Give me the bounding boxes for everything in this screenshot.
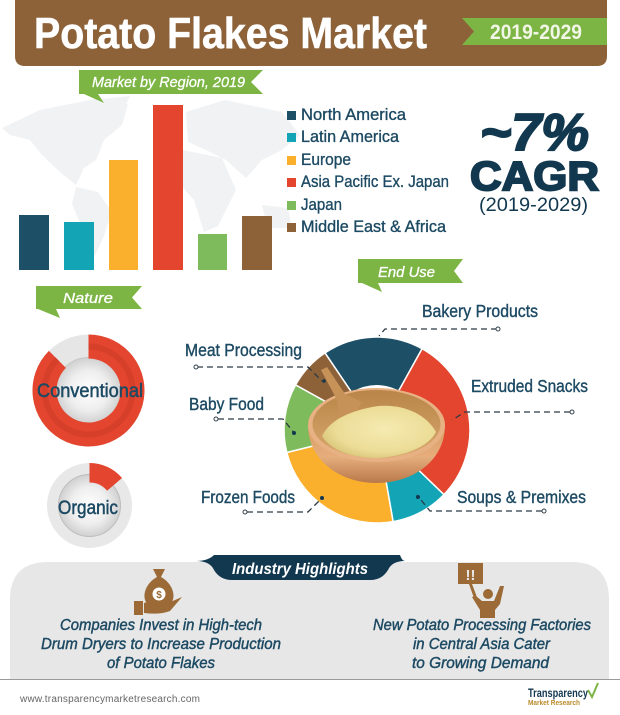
header banner: [15, 0, 607, 66]
text: processing factories: [373, 617, 591, 672]
label: bakery products: Bakery Products: [422, 301, 538, 321]
ribbon: nature: [36, 286, 142, 318]
ribbon: market by region: Market by Region, 2019: [92, 74, 246, 91]
ribbon: end use: End Use: [378, 264, 435, 281]
ribbon: nature: Nature: [63, 290, 113, 307]
label: soups and premixes: [416, 487, 586, 513]
highlights tab: Industry Highlights: [232, 561, 368, 578]
text: drum dryers: of Potato Flakes: [107, 655, 215, 672]
label: soups and premixes: Soups & Premixes: [457, 487, 586, 507]
pie chart: end use: [284, 337, 470, 523]
text: drum dryers: Drum Dryers to Increase Production: [41, 636, 281, 653]
legend: [287, 106, 449, 236]
legend: North America: [301, 106, 407, 124]
label: meat processing: [185, 340, 326, 383]
donut: conventional: [32, 334, 144, 447]
period ribbon: 2019-2029: [490, 21, 582, 44]
CAGR callout: ~7%: [480, 104, 589, 162]
text: processing factories: to Growing Demand: [412, 655, 550, 672]
bar chart: [19, 105, 272, 270]
highlights tab: [196, 555, 405, 580]
text: processing factories: New Potato Processing Factories: [373, 617, 591, 634]
label: baby food: [189, 394, 296, 435]
text: drum dryers: [41, 617, 281, 672]
label: meat processing: Meat Processing: [185, 340, 302, 360]
label: baby food: Baby Food: [189, 394, 264, 414]
CAGR callout: (2019-2029): [479, 195, 588, 216]
logo: Market Research: [528, 700, 580, 707]
bowl of potato flakes: [308, 367, 445, 483]
logo: Transparency: [528, 688, 588, 700]
period ribbon: [462, 18, 607, 45]
footer url: www.transparencymarketresearch.com: [19, 694, 200, 705]
CAGR callout: CAGR: [470, 153, 599, 199]
panel: industry highlights: [10, 555, 609, 679]
title: Potato Flakes Market: [34, 9, 427, 58]
label: frozen foods: Frozen Foods: [201, 487, 295, 507]
label: frozen foods: [201, 487, 324, 514]
icon: money bag in hand: [134, 569, 182, 615]
legend: Europe: [301, 151, 351, 169]
donut: organic: [47, 463, 132, 548]
ribbon: end use: [358, 259, 463, 292]
text: processing factories: in Central Asia Cater: [413, 636, 551, 653]
icon: person holding sign: !!: [466, 567, 476, 584]
CAGR callout: [470, 104, 599, 216]
donut: conventional: Conventional: [37, 381, 143, 402]
label: extruded snacks: Extruded Snacks: [471, 376, 588, 396]
icon: money bag in hand: $: [156, 590, 162, 601]
ribbon: market by region: [79, 70, 263, 103]
logo: [528, 683, 598, 707]
text: drum dryers: Companies Invest in High-tech: [60, 617, 262, 634]
legend: Middle East & Africa: [301, 218, 447, 236]
icon: person holding sign: [458, 563, 504, 618]
legend: Latin America: [301, 128, 400, 146]
label: bakery products: [379, 301, 538, 336]
label: extruded snacks: [452, 376, 588, 420]
donut: organic: Organic: [58, 498, 118, 519]
world map background: [2, 96, 300, 262]
legend: Asia Pacific Ex. Japan: [301, 173, 449, 191]
legend: Japan: [301, 196, 342, 214]
